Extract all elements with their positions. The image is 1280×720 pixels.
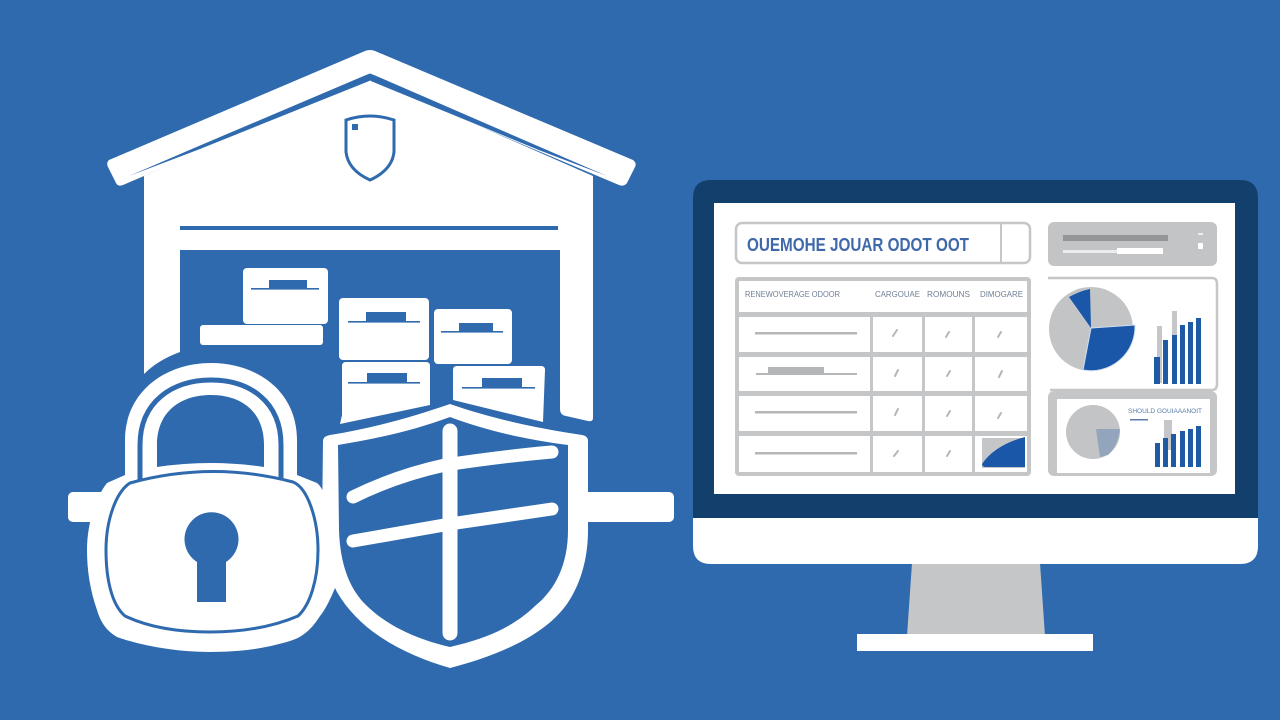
chart panel: lower <box>1048 391 1217 476</box>
gray status card <box>1048 222 1217 266</box>
small pie chart <box>1066 405 1120 459</box>
icon: shield <box>322 404 588 668</box>
garage body <box>144 78 593 421</box>
padlock shackle <box>140 380 281 482</box>
icon: desktop monitor <box>693 180 1258 651</box>
garage roof <box>107 50 636 186</box>
padlock outline <box>87 363 335 652</box>
storage boxes <box>200 268 545 424</box>
monitor screen <box>714 203 1235 494</box>
dashboard title bar <box>736 223 1030 263</box>
table header <box>739 281 1027 312</box>
data table <box>735 277 1031 476</box>
dashboard title text: OUEMOHE JOUAR ODOT OOT <box>747 235 969 255</box>
padlock keyhole <box>185 512 239 602</box>
table cells <box>739 317 1027 472</box>
roof line <box>129 74 607 176</box>
table row lines <box>755 332 857 454</box>
data table: DIMOGARE <box>980 289 1023 299</box>
monitor chin <box>693 515 1258 564</box>
icon: small shield on gable <box>346 116 394 180</box>
pie chart <box>1049 287 1135 371</box>
small bar chart <box>1155 420 1201 467</box>
garage door line <box>180 226 558 230</box>
shield interior <box>338 417 568 647</box>
panel caption: SHOULD GOUIAAANOIT <box>1128 409 1202 415</box>
icon: padlock <box>87 363 335 652</box>
shield cross strokes <box>353 431 552 633</box>
padlock body line <box>106 472 318 632</box>
chart panel: upper <box>1048 278 1217 390</box>
bar chart <box>1154 311 1201 384</box>
data table: ROMOUNS <box>927 289 970 299</box>
monitor frame <box>693 180 1258 518</box>
icon: storage garage <box>107 50 636 424</box>
monitor base <box>857 634 1093 651</box>
data table: CARGOUAE <box>875 289 920 299</box>
table cell ticks <box>893 330 1002 456</box>
table mini chart <box>982 438 1025 468</box>
bar behind lock and shield <box>68 492 674 522</box>
shield outline <box>322 404 588 668</box>
monitor stand <box>907 563 1045 636</box>
data table: RENEWOVERAGE ODOOR <box>745 289 840 299</box>
